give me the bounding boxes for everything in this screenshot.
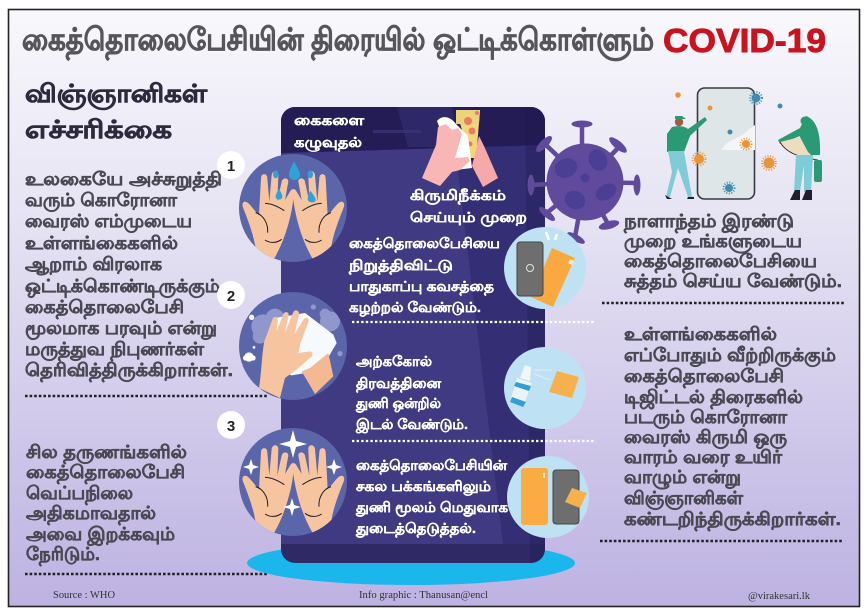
heading: wash hands (294, 112, 364, 152)
text block: virus survives on screens: படரும் கொரோனா (624, 407, 788, 429)
badge 3: 3 (227, 418, 235, 435)
footer: handle: @virakesari.lk (748, 591, 810, 602)
text block: remove cover: பாதுகாப்பு கவசத்தை (349, 278, 494, 296)
text block: left paragraph 1: மருத்துவ நிபுணர்கள் (25, 339, 205, 362)
badge 1: 1 (227, 158, 235, 175)
text block: virus survives on screens: கண்டறிந்திருக்கிறார்கள். (624, 509, 841, 532)
text block: remove cover: நிறுத்திவிட்டு (348, 257, 453, 275)
icon: phone and cover (504, 227, 586, 309)
icon: phones and cloth (507, 456, 589, 538)
text block: wipe all sides: துணி மூலம் மெதுவாக (355, 499, 508, 516)
text block: virus survives on screens: வாரம் வரை உயிர் (624, 447, 783, 467)
text block: wipe all sides: கைத்தொலைபேசியின் (356, 457, 507, 475)
step 2: soap (239, 292, 347, 400)
badge 3 (217, 411, 245, 439)
text block: clean twice daily (623, 211, 842, 294)
text block: left paragraph 2: வெப்பநிலை (26, 483, 133, 506)
text block: clean twice daily: நாளாந்தம் இரண்டு (623, 211, 794, 234)
text block: left paragraph 2: அதிகமாவதால் (26, 503, 156, 526)
text block: virus survives on screens: விஞ்ஞானிகள் (624, 488, 744, 510)
badge 2: 2 (227, 288, 235, 305)
heading: scientists warning: விஞ்ஞானிகள் (25, 80, 207, 111)
badge 1 (217, 151, 245, 179)
water puddle under phone (247, 541, 575, 585)
text block: clean twice daily: சுத்தம் செய்ய வேண்டும். (624, 271, 842, 294)
text block: left paragraph 1: வைரஸ் எம்முடைய (25, 211, 192, 233)
heading: disinfection method: செய்யும் முறை (410, 209, 527, 226)
text block: alcohol on cloth: திரவத்தினை (356, 375, 441, 393)
text block: left paragraph 2: சில தருணங்களில் (26, 442, 187, 465)
footer: credit: Info graphic : Thanusan@encl (359, 590, 488, 601)
title: கைத்தொலைபேசியின் திரையில் ஒட்டிக்கொள்ளும் (22, 22, 654, 61)
text block: left paragraph 2: கைத்தொலைபேசி (26, 462, 185, 485)
text block: clean twice daily: கைத்தொலைபேசியை (624, 251, 817, 274)
text block: left paragraph 1 (25, 169, 233, 383)
icon: virus (528, 120, 640, 246)
heading: disinfection method (410, 187, 527, 226)
heading: scientists warning: எச்சரிக்கை (25, 116, 172, 144)
title: COVID-19 (663, 23, 826, 60)
text block: virus survives on screens (624, 324, 841, 532)
text block: clean twice daily: முறை உங்களுடைய (624, 231, 802, 254)
text block: virus survives on screens: டிஜிட்டல் திரைகளில் (624, 387, 803, 410)
text block: left paragraph 1: ஒட்டிக்கொண்டிருக்கும் (25, 276, 220, 298)
person right with sprayer (778, 116, 822, 200)
text block: virus survives on screens: வைரஸ் கிருமி ஒரு (624, 427, 787, 449)
text block: left paragraph 1: உள்ளங்கைகளில் (25, 233, 178, 253)
text block: left paragraph 1: கைத்தொலைபேசி (25, 297, 184, 320)
text block: left paragraph 2 (26, 442, 187, 567)
text block: left paragraph 2: நேரிடும். (26, 544, 100, 567)
badge 2 (217, 281, 245, 309)
text block: remove cover (348, 235, 500, 317)
text block: remove cover: கழற்றல் வேண்டும். (349, 299, 481, 317)
text block: virus survives on screens: எப்போதும் வீற்றிருக்கும் (624, 345, 836, 367)
text block: virus survives on screens: கைத்தொலைபேசி (624, 366, 784, 389)
step 3: clean hands (239, 428, 347, 536)
text block: alcohol on cloth: இடல் வேண்டும். (355, 416, 468, 433)
text block: virus survives on screens: வாழும் என்று (624, 467, 741, 490)
text block: virus survives on screens: உள்ளங்கைகளில் (624, 324, 777, 344)
person left (665, 116, 707, 199)
icon: spray and cloth (504, 347, 586, 429)
text block: left paragraph 1: தெரிவித்திருக்கிறார்கள். (25, 360, 233, 383)
text block: alcohol on cloth (355, 353, 468, 433)
text block: left paragraph 1: ஆறாம் விரலாக (25, 254, 163, 275)
text block: wipe all sides: சகல பக்கங்களிலும் (356, 478, 491, 496)
illustration: phone with people and germs (665, 88, 822, 200)
heading: wash hands: கைகளை (294, 112, 364, 128)
footer: source: Source : WHO (53, 590, 115, 601)
heading: disinfection method: கிருமிநீக்கம் (410, 187, 506, 205)
text block: alcohol on cloth: அற்ககோல் (356, 353, 432, 370)
text block: left paragraph 1: மூலமாக பரவும் என்று (25, 318, 217, 340)
text block: wipe all sides: துடைத்தெடுத்தல். (355, 520, 476, 538)
heading: scientists warning (25, 80, 207, 144)
text block: left paragraph 1: வரும் கொரோனா (25, 190, 178, 212)
text block: left paragraph 1: உலகையே அச்சுறுத்தி (25, 169, 222, 192)
text block: alcohol on cloth: துணி ஒன்றில் (355, 395, 441, 412)
text block: wipe all sides (355, 457, 508, 538)
text block: remove cover: கைத்தொலைபேசியை (349, 235, 500, 253)
step 1: wet hands (239, 154, 347, 262)
text block: left paragraph 2: அவை இறக்கவும் (26, 524, 175, 545)
phone panel (281, 107, 545, 563)
heading: wash hands: கழுவுதல் (294, 134, 362, 152)
icon: hands wiping phone (422, 110, 498, 187)
